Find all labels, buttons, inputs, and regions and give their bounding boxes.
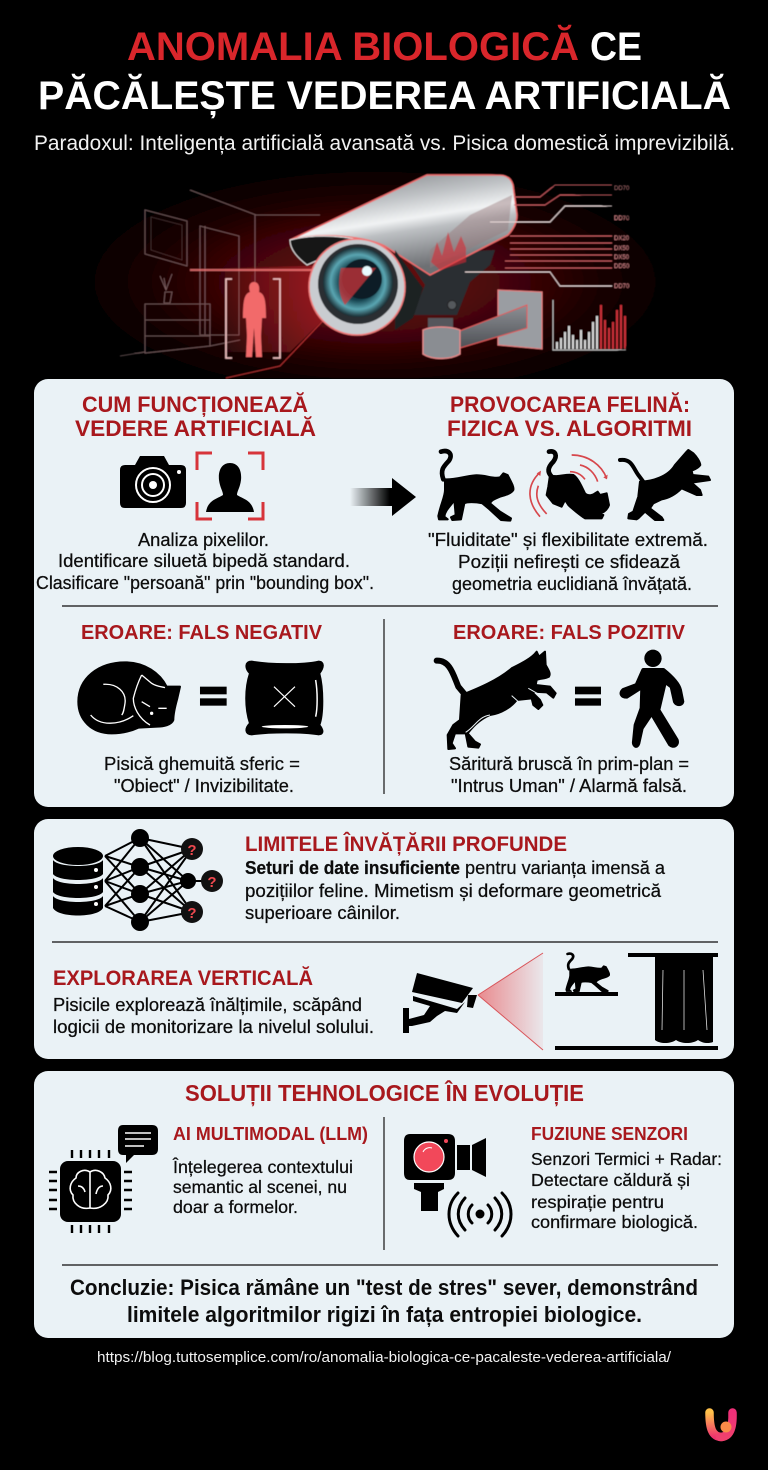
heading: feline challenge (447, 392, 692, 441)
title: PĂCĂLEȘTE VEDEREA ARTIFICIALĂ (38, 73, 731, 118)
text: pixel analysis: Identificare siluetă bipedă standard. (58, 550, 350, 571)
icon: photo camera (120, 456, 186, 508)
laser beam (225, 265, 345, 352)
text: insufficient datasets: Seturi de date insuficiente (245, 858, 460, 878)
text: insufficient datasets: pentru varianța imensă a (465, 858, 666, 878)
title (38, 24, 731, 118)
text: insufficient datasets: superioare câinilor. (245, 903, 400, 923)
readout numbers: DX50 (614, 255, 630, 261)
text: insufficient datasets: pozițiilor feline. Mimetism și deformare geometrică (245, 881, 662, 901)
icon: database and neural network (53, 829, 223, 931)
text: fluidity: geometria euclidiană învățată. (452, 573, 692, 594)
heading: multimodal AI: AI MULTIMODAL (LLM) (173, 1123, 368, 1144)
text: pixel analysis: Analiza pixelilor. (138, 529, 269, 550)
arrow (350, 478, 416, 516)
camera hood (290, 175, 517, 275)
text: pixel analysis (36, 529, 374, 593)
heading: technology solutions: SOLUȚII TEHNOLOGICE ÎN EVOLUȚIE (185, 1079, 584, 1106)
source url: https://blog.tuttosemplice.com/ro/anomalia-biologica-ce-pacaleste-vederea-artificiala/ (97, 1349, 672, 1366)
text: semantic context: Înțelegerea contextului (172, 1157, 353, 1177)
text: cats explore heights: logicii de monitorizare la nivelul solului. (53, 1017, 374, 1037)
camera lower body (405, 250, 495, 315)
mini bar chart (553, 300, 626, 350)
text: false negative explanation: Pisică ghemuită sferic = (104, 754, 300, 774)
camera lens (395, 250, 423, 330)
heading: how computer vision works (75, 392, 316, 441)
text: cats explore heights: Pisicile explorează înălțimile, scăpând (53, 995, 362, 1015)
text: semantic context (172, 1157, 353, 1217)
heading: vertical exploration: EXPLORAREA VERTICALĂ (53, 965, 313, 990)
icon: database and neural network: ? (207, 874, 217, 891)
heading: false positive: EROARE: FALS POZITIV (453, 621, 685, 644)
readout numbers: DD70 (614, 186, 630, 192)
panel: technology solutions (34, 1071, 734, 1338)
text: semantic context: doar a formelor. (173, 1197, 298, 1217)
icon: person in detection brackets (197, 453, 263, 519)
icon: AI chip with brain and speech bubble (49, 1125, 158, 1233)
heading: how computer vision works: CUM FUNCȚIONEAZĂ (82, 392, 308, 417)
text: false negative explanation: "Obiect" / Invizibilitate. (114, 776, 294, 796)
text: pixel analysis: Clasificare "persoană" prin "bounding box". (36, 572, 374, 593)
icon: three cat poses (438, 450, 710, 521)
panel: how vision works and feline challenge (34, 379, 734, 807)
text: thermal and radar sensors: Detectare căldură și (531, 1170, 690, 1190)
text: insufficient datasets (245, 858, 666, 923)
readout numbers (614, 186, 630, 290)
text: fluidity: Poziții nefirești ce sfidează (458, 551, 681, 572)
text: cats explore heights (53, 995, 374, 1037)
text: false positive explanation: "Intrus Uman" / Alarmă falsă. (451, 776, 687, 796)
text: thermal and radar sensors: respirație pentru (531, 1192, 664, 1212)
readout numbers: DD50 (614, 264, 630, 270)
text: thermal and radar sensors (531, 1149, 722, 1232)
subtitle: Paradoxul: Inteligența artificială avansată vs. Pisica domestică imprevizibilă. (34, 132, 735, 155)
text: semantic context: semantic al scenei, nu (173, 1177, 347, 1197)
bounding box and person (226, 279, 280, 358)
conclusion: limitele algoritmilor rigizi în fața entropiei biologice. (127, 1302, 642, 1327)
icon: database and neural network: ? (187, 842, 197, 859)
icon: CCTV camera with view cone (403, 953, 543, 1050)
conclusion (70, 1275, 698, 1327)
heading: feline challenge: FIZICA VS. ALGORITMI (447, 416, 692, 441)
conclusion: Concluzie: Pisica rămâne un "test de stres" sever, demonstrând (70, 1275, 698, 1300)
text: thermal and radar sensors: confirmare biologică. (531, 1212, 698, 1232)
heading: false negative: EROARE: FALS NEGATIV (81, 621, 322, 644)
icon: curtain rod and curtains (628, 953, 718, 1043)
readout numbers: DX50 (614, 246, 630, 252)
icon: leaping cat equals walking person (437, 650, 682, 749)
icon: database and neural network: ? (187, 905, 197, 922)
text: fluidity (428, 529, 708, 594)
text: false positive explanation (449, 754, 689, 796)
floor line (555, 1046, 718, 1050)
text: thermal and radar sensors: Senzori Termici + Radar: (531, 1149, 722, 1169)
heading: deep learning limits: LIMITELE ÎNVĂȚĂRII PROFUNDE (245, 831, 567, 856)
text: false negative explanation (104, 754, 300, 796)
camera wall mount (498, 290, 542, 349)
heading: feline challenge: PROVOCAREA FELINĂ: (450, 392, 690, 417)
icon: cat walking on a high shelf (555, 954, 618, 996)
heading: how computer vision works: VEDERE ARTIFICIALĂ (75, 416, 316, 441)
readout numbers: DD70 (614, 216, 630, 222)
text: false positive explanation: Săritură bruscă în prim-plan = (449, 754, 689, 774)
title: CE (590, 25, 642, 69)
hero illustration: security camera scanning a room (0, 164, 768, 408)
readout numbers: DX20 (614, 236, 630, 242)
title: ANOMALIA BIOLOGICĂ (127, 24, 579, 69)
icon: curled cat equals pillow (78, 662, 323, 734)
room line drawing (120, 190, 320, 356)
data readout lines (465, 185, 612, 286)
text: fluidity: "Fluiditate" și flexibilitate extremă. (428, 529, 708, 550)
panel: deep learning limits and vertical exploration (34, 819, 734, 1059)
readout numbers: DD70 (614, 284, 630, 290)
heading: sensor fusion: FUZIUNE SENZORI (531, 1123, 688, 1144)
icon: brand logo (710, 1412, 733, 1437)
icon: thermal camera with radar signal (404, 1134, 511, 1236)
